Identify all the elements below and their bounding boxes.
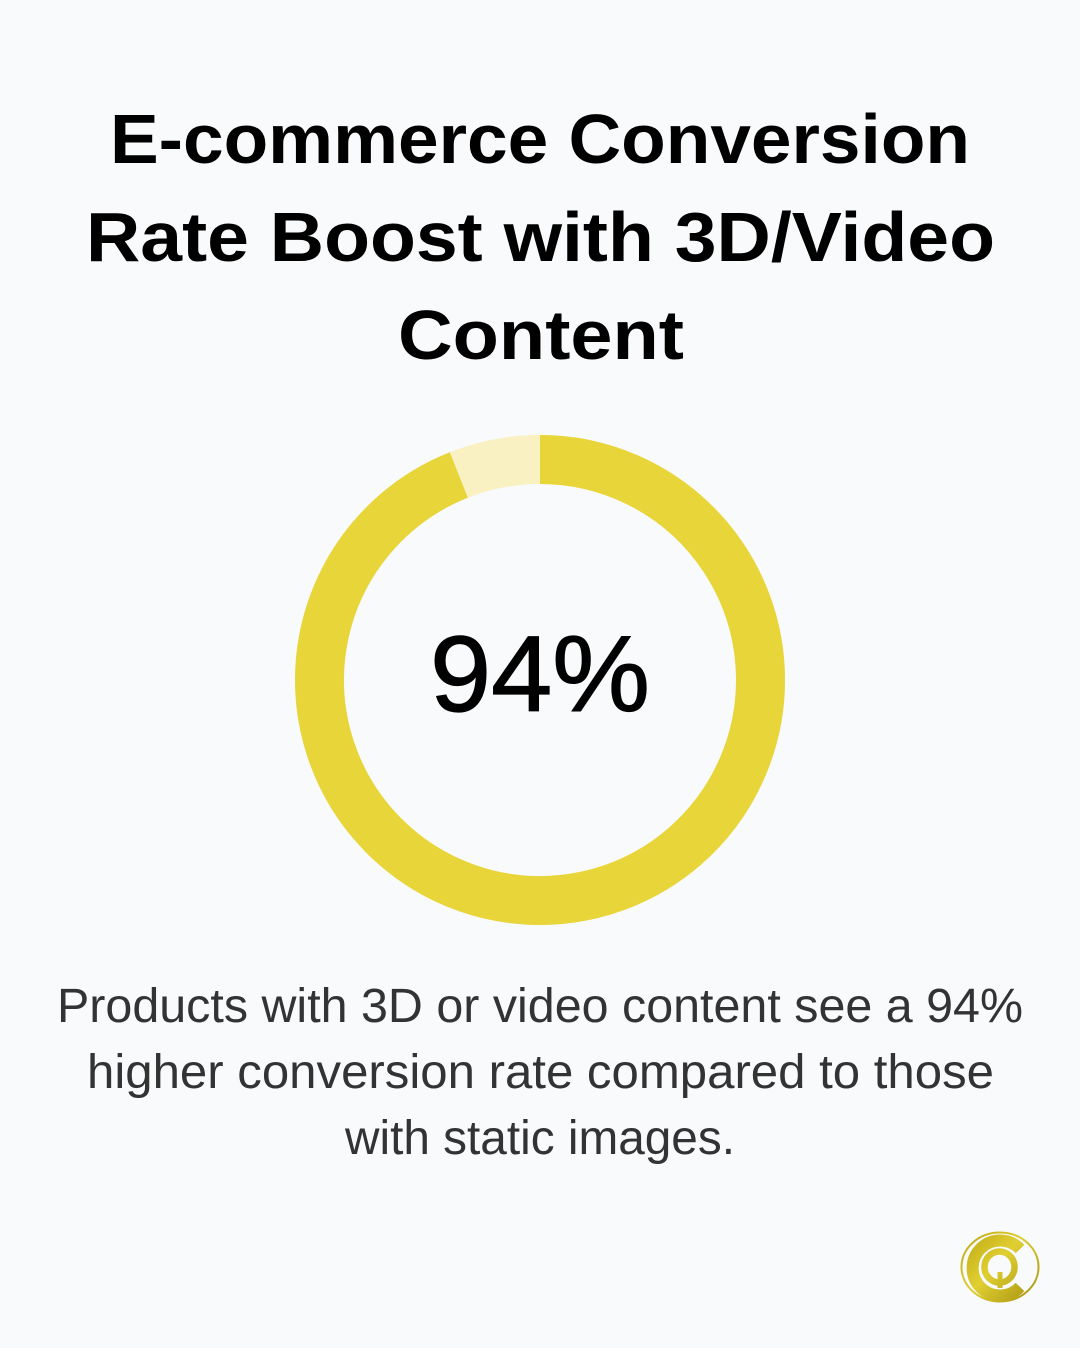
donut chart: 94%: [320, 460, 761, 900]
title: E-commerce Conversion: [110, 100, 970, 178]
description text: higher conversion rate compared to those: [87, 1046, 994, 1099]
icon: gold circular logo: [962, 1232, 1038, 1302]
title: [86, 100, 995, 374]
donut track: remaining 6%: [320, 460, 760, 900]
description text: with static images.: [344, 1112, 735, 1165]
description text: [57, 980, 1023, 1165]
donut value: 94%: [430, 613, 650, 734]
title: Rate Boost with 3D/Video: [86, 198, 995, 276]
description text: Products with 3D or video content see a 94%: [57, 980, 1023, 1033]
donut segment: 94%: [320, 460, 761, 900]
title: Content: [398, 296, 684, 374]
